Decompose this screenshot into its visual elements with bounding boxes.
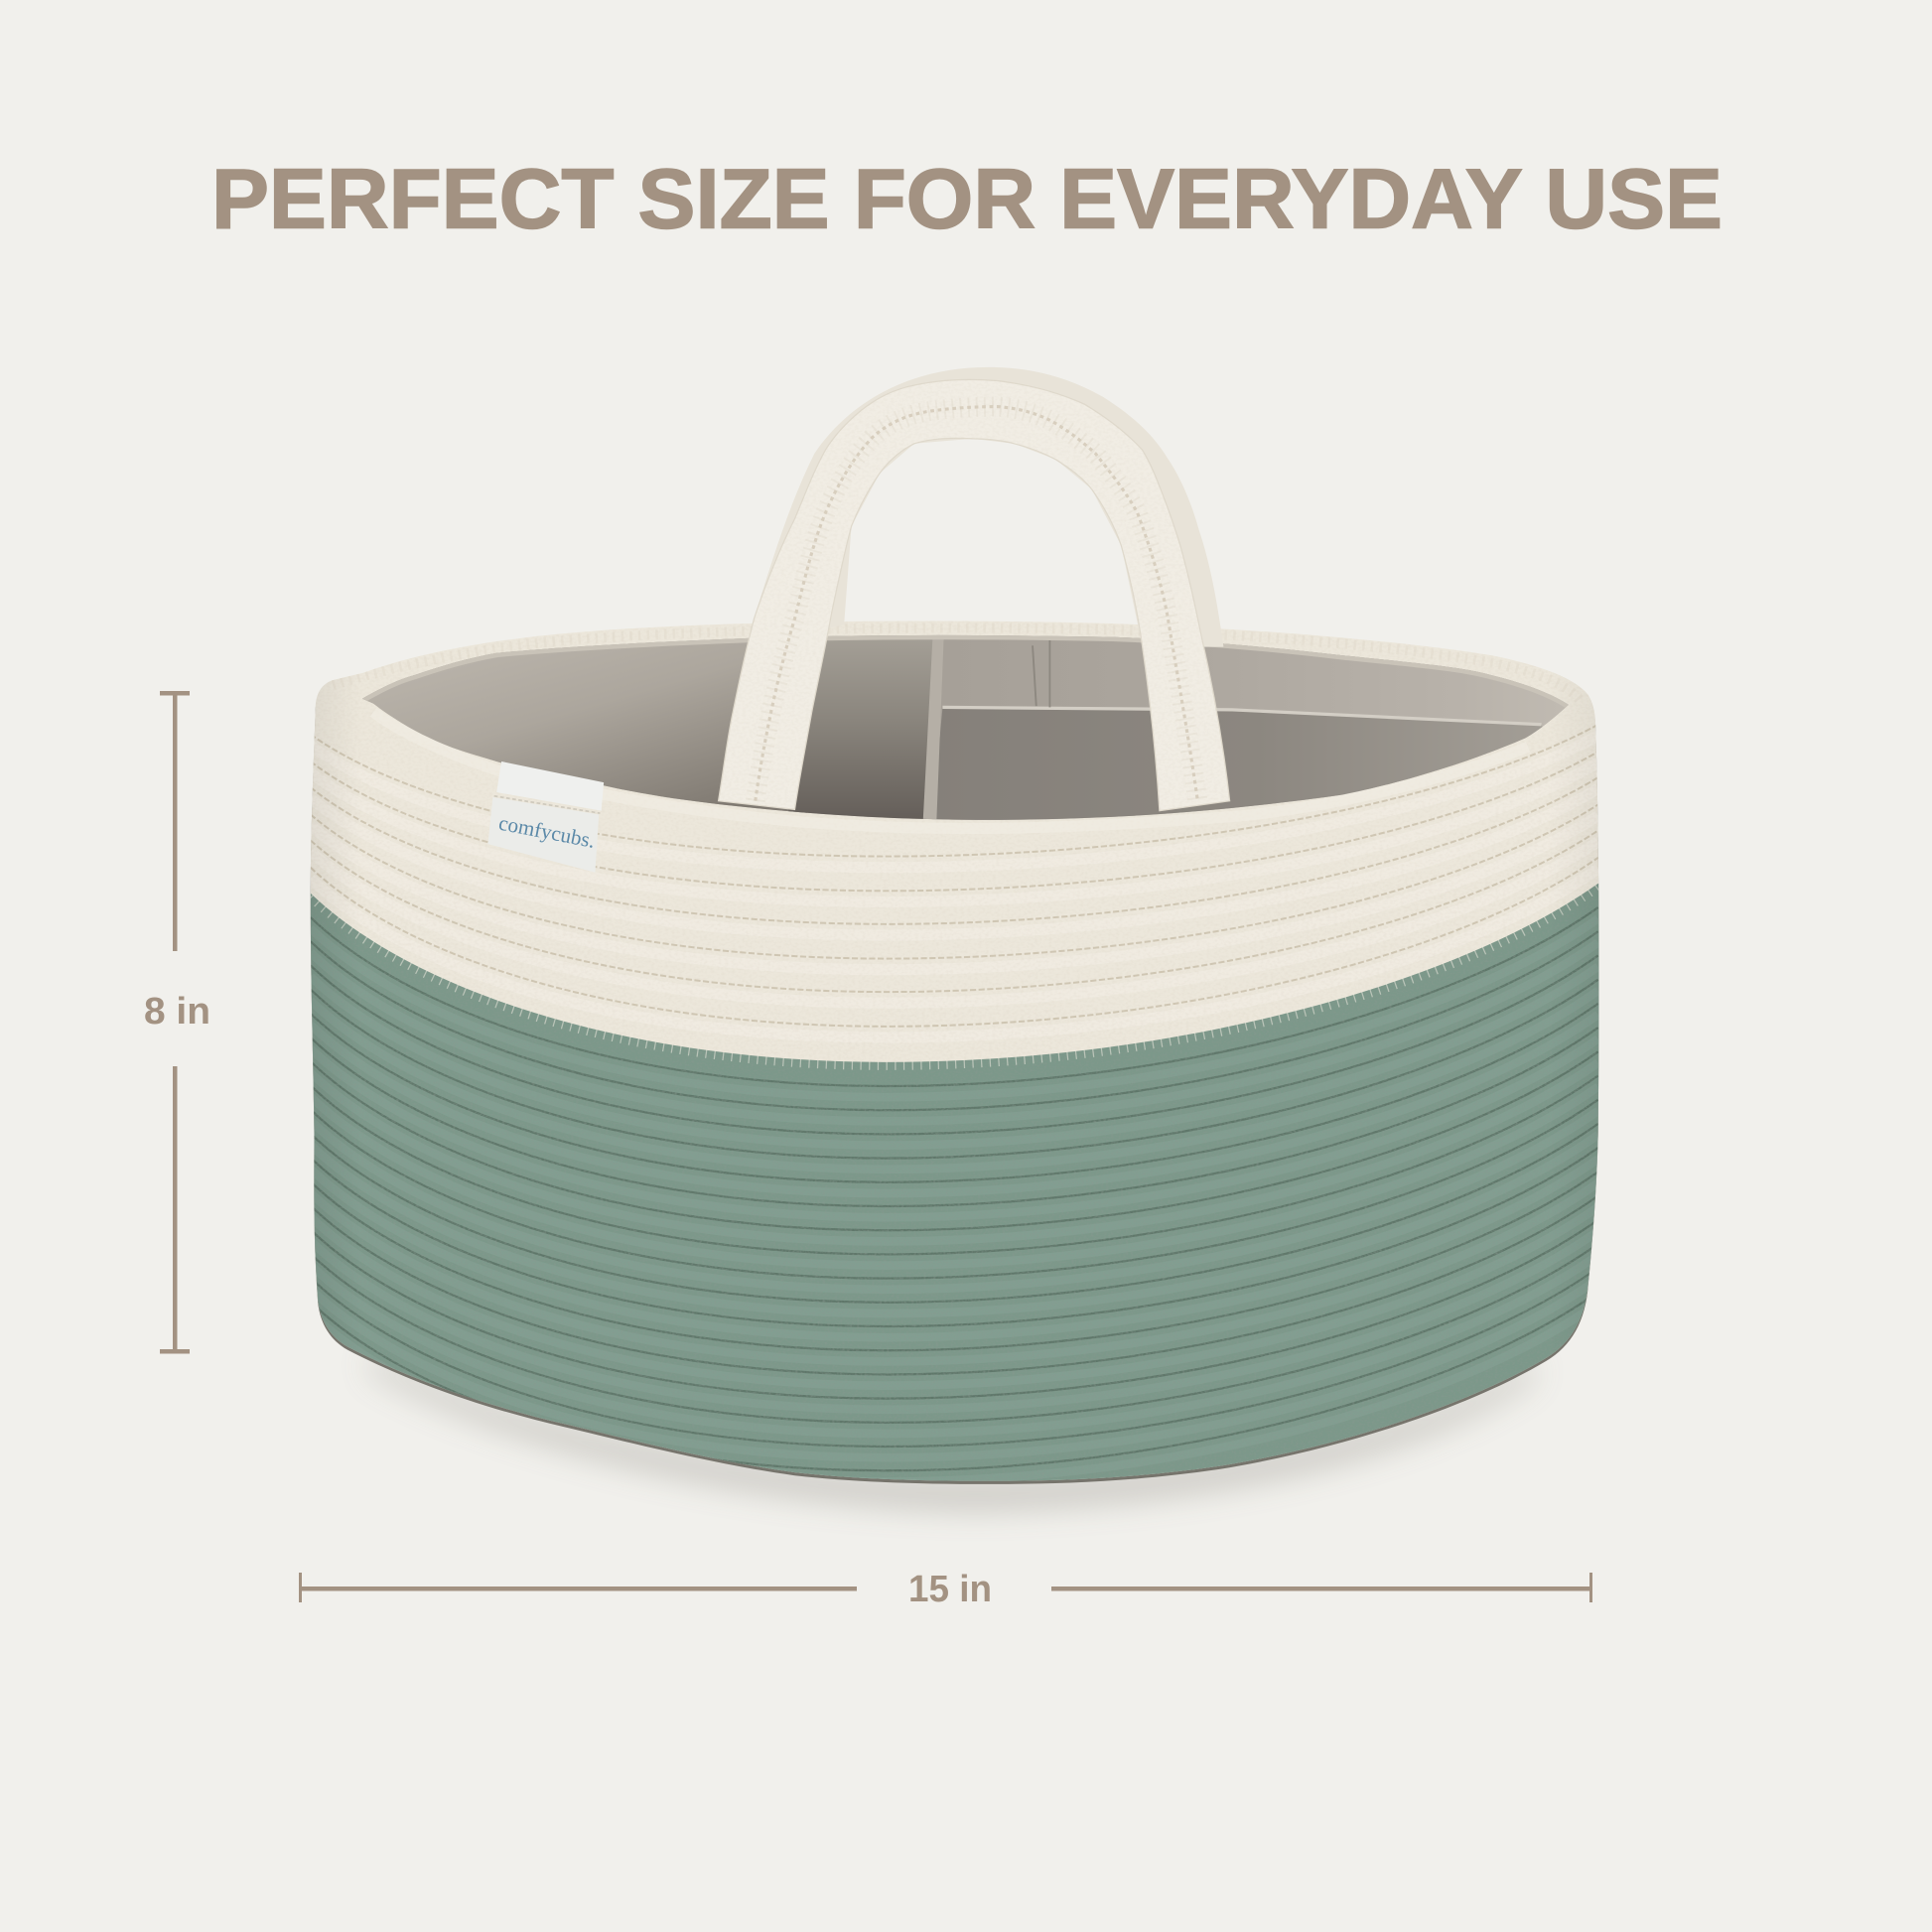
dark compartment between handle legs <box>788 634 940 826</box>
back handle <box>755 367 1223 647</box>
height dimension: 8 in <box>144 691 210 1354</box>
carry handles <box>715 357 1238 813</box>
side shading <box>311 681 1598 1277</box>
back panel seam <box>1033 638 1049 707</box>
basket interior lining <box>362 635 1569 820</box>
pocket top edge <box>942 707 1542 725</box>
label tab <box>496 761 604 811</box>
central divider <box>923 635 944 823</box>
width dimension: 15 in <box>299 1569 1592 1610</box>
fabric brand label <box>487 761 604 873</box>
handle braid <box>756 407 1197 801</box>
back panel <box>940 635 1565 730</box>
label face <box>487 797 599 873</box>
green rope rows <box>311 907 1598 1481</box>
front rim highlight <box>373 712 1528 828</box>
basket body <box>296 604 1614 1503</box>
cream rope rows <box>311 725 1598 1037</box>
ground shadow <box>311 624 1598 1508</box>
height label: 8 in <box>144 991 210 1033</box>
width label: 15 in <box>908 1569 992 1610</box>
brand name: comfycubs. <box>496 811 597 853</box>
right front pocket panel <box>932 709 1543 820</box>
handle fibre texture <box>715 357 1238 813</box>
inner lip <box>362 635 1569 705</box>
cream fibre texture <box>332 779 1386 971</box>
green lower section <box>296 884 1614 1503</box>
title: PERFECT SIZE FOR EVERYDAY USE <box>211 153 1723 246</box>
label stitching <box>494 796 600 813</box>
product photo: rope basket <box>296 357 1614 1508</box>
white fringe at colour boundary <box>311 888 1598 1066</box>
back rim rope <box>333 628 1580 700</box>
handle rope seam <box>756 407 1197 801</box>
left compartment <box>367 637 807 813</box>
green fibre texture <box>312 908 1598 1471</box>
front handle <box>719 379 1230 811</box>
